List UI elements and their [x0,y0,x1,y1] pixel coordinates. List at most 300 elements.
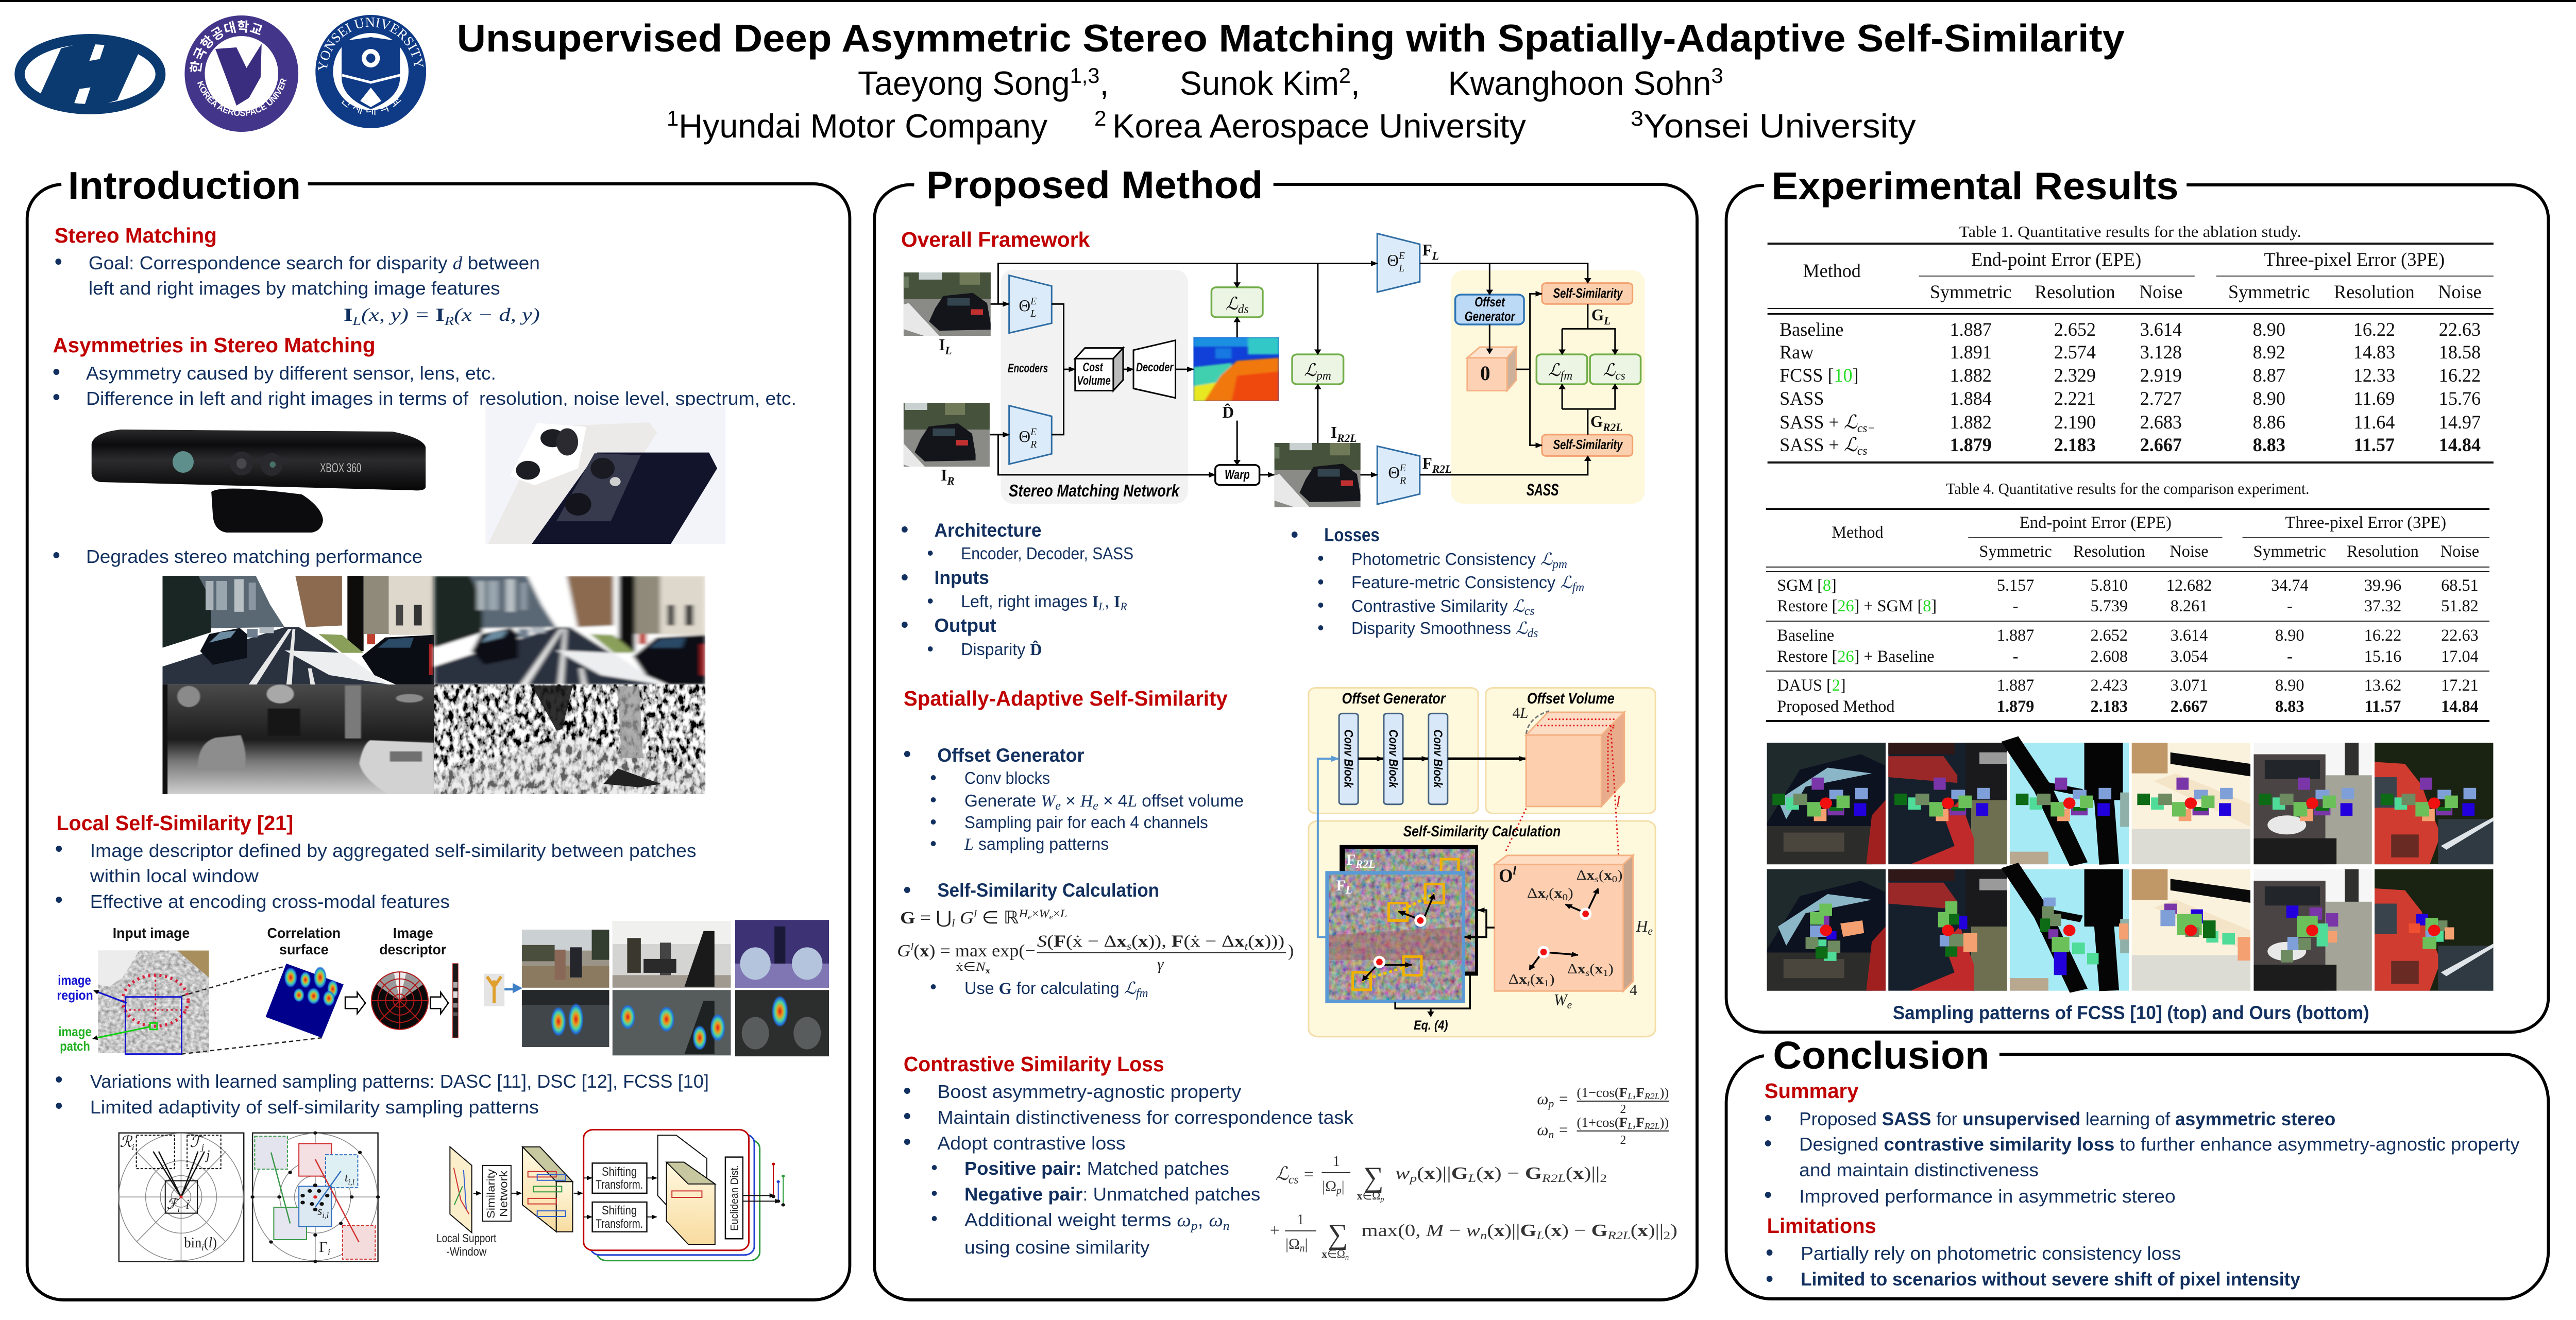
text: architecture inputs output: Disparity D̂ [961,640,1042,659]
formula: G definition: G = ⋃ [900,908,947,928]
formula: cosine weights: 2 [1620,1134,1626,1147]
diagram labels: Offset Volume [1527,690,1615,707]
table 1: ablation study: 3.614 [2140,319,2182,340]
text: offset generator bullets: L offset volume [1127,791,1240,811]
text: summary bullets [1765,1109,2520,1207]
table 4: comparison experiment: 2.183 [2091,697,2128,716]
authors: , [1351,64,1360,102]
formula: G definition: l [952,918,955,929]
formula: cosine weights: 2 [1620,1103,1626,1116]
table 1: ablation study: 11.57 [2354,434,2395,455]
photo: left sharp street [162,576,434,684]
formula: contrastive similarity loss: | [1305,1236,1308,1253]
formula: contrastive similarity loss: p [1409,1172,1417,1185]
framework labels: I [1331,423,1337,441]
table 4: comparison experiment: SGM [ [1777,576,1823,595]
formula: G^l definition: x) = max exp(− [920,941,1027,961]
diagram labels: ( [1599,867,1604,883]
diagram labels: ) [1608,961,1614,976]
framework labels: Decoder [1136,361,1174,374]
table 4: comparison experiment: 26] + Baseline [1837,647,1935,666]
arrow: blue [504,983,522,993]
diagram labels: e [1567,999,1572,1011]
table 4: comparison experiment: - [2287,647,2293,666]
formula: contrastive similarity loss: 1 [1333,1153,1340,1169]
affiliations: Korea Aerospace University [1112,107,1526,145]
table 1: ablation study: 2.683 [2140,412,2182,433]
table 1: ablation study: 14.84 [2439,434,2481,455]
diagram labels: Δx [1509,971,1526,987]
diagram labels: x [1604,867,1613,883]
table 4: comparison experiment: 51.82 [2441,597,2479,615]
subheading: Asymmetries in Stereo Matching: Asymmetries in Stereo Matching [53,333,376,357]
diagram labels: W [1554,991,1567,1009]
table 1: ablation study: Noise [2438,281,2482,302]
table 4: comparison experiment: DAUS [ [1777,676,1832,695]
text: architecture inputs output [902,520,1133,659]
text: contrastive loss bullets [904,1082,1353,1258]
formula: G definition: W [1039,907,1050,920]
table 4: comparison experiment: Symmetric [1979,542,2052,561]
panel: Conclusion [1726,1034,2548,1299]
text: self-similarity calculation: Use G for calculating ℒ [964,979,1136,998]
text: offset generator bullets: Conv blocks [964,768,1050,787]
formula: cosine weights: )) [1659,1115,1669,1130]
formula: contrastive similarity loss [1270,1153,1677,1262]
table 1: ablation study: FCSS [ [1780,365,1834,386]
formula: G definition: L [1060,907,1067,920]
subheading: Summary: Summary [1765,1079,1859,1103]
text: summary bullets: Improved performance in asymmetric stereo [1799,1186,2176,1207]
formula: contrastive similarity loss: ( [1476,1164,1483,1183]
logo: Korea Aerospace University [184,15,299,132]
figure: sampling pattern diagrams [119,1129,785,1263]
subheading: Spatially-Adaptive Self-Similarity: Spatially-Adaptive Self-Similarity [904,687,1228,710]
text: offset generator bullets: Generate W [964,791,1055,811]
text: stereo matching goal: I [435,304,445,325]
framework labels: SASS [1527,481,1558,499]
framework labels: R [1399,475,1406,486]
image: Kinect sensor [92,430,426,533]
row: our patterns [1767,865,2493,991]
diagram: spatially-adaptive self-similarity [1309,688,1655,1037]
table 1: ablation study: End-point Error (EPE) [1971,249,2141,270]
table 1: ablation study: 8.92 [2253,341,2285,363]
text: architecture inputs output: Encoder, Decoder, SASS [961,544,1133,563]
formula: contrastive similarity loss: ( [1566,1164,1573,1183]
table 4: comparison experiment: 5.739 [2091,597,2128,615]
image: right input [904,403,990,467]
formula: contrastive similarity loss: n [1345,1254,1349,1262]
image descriptor [371,971,428,1030]
framework labels [939,241,1625,500]
figure: local self-similarity pipeline [57,920,829,1056]
table 1: ablation study: 11.64 [2353,412,2395,433]
formula: G definition: l [974,908,977,920]
loss: ds [1211,287,1263,317]
panel: Experimental Results [1726,164,2548,1032]
table 4: comparison experiment: 8] [1823,576,1837,595]
affiliations: 3 [1631,106,1643,130]
text: LSS bullets: Effective at encoding cross-modal features [90,892,450,912]
block: SASS background [1451,270,1645,504]
formula: contrastive similarity loss: |Ω [1322,1178,1336,1195]
diagram labels: F [1346,852,1355,868]
text: architecture inputs output: Inputs [934,567,989,588]
diagram labels: t [345,1171,348,1185]
table 1: ablation study: Raw [1780,341,1814,363]
formula: contrastive similarity loss: x)|| [1573,1164,1597,1183]
framework labels: ℒ [1226,295,1238,314]
table 4: comparison experiment: 13.62 [2364,676,2401,695]
diagram labels: Conv Block [1341,729,1355,788]
framework labels: L [944,345,952,357]
diagram labels: ( [1530,971,1536,987]
block: offset cube [1467,347,1516,391]
diagram labels: ( [1589,961,1595,976]
formula: cosine weights: = [1554,1121,1569,1139]
text: LSS bullets: within local window [90,866,259,886]
table 4: comparison experiment: 3.614 [2171,626,2208,645]
table 1: ablation study: cs [1857,444,1867,458]
text: offset generator bullets [904,745,1244,854]
framework labels: R2L [1336,432,1357,444]
table 4: comparison experiment: 1.879 [1997,697,2034,716]
logo: Korea Aerospace University: 한국항공대학교 [190,20,262,72]
diagram labels: bin [184,1235,202,1250]
figure labels: Correlation [267,925,341,941]
formula: cosine weights: (1+cos(F [1577,1115,1627,1130]
image: warped right [1275,443,1361,507]
text: offset generator bullets: e [1093,799,1098,813]
table 4: comparison experiment: 16.22 [2364,626,2401,645]
encoder: right [1009,406,1052,464]
text: limitations bullets: Limited to scenarios without severe shift of pixel intensity [1801,1269,2300,1290]
text: architecture inputs output: L [1098,601,1105,613]
table 4: comparison experiment: Resolution [2347,542,2419,561]
table 1: ablation study: 1.891 [1950,341,1992,363]
diagram labels [1336,690,1653,1033]
text: contrastive loss bullets: , [1198,1210,1209,1230]
diagram labels: l) [209,1235,217,1250]
formula: contrastive similarity loss: x∈Ω [1321,1248,1345,1260]
logo: Hyundai [20,39,161,110]
feature map: FR2L [1340,845,1478,975]
authors: Taeyong Song [858,64,1067,102]
table 4: comparison experiment: 2.652 [2091,626,2128,645]
diagram labels: ) [1617,867,1622,883]
framework labels: 0 [1480,362,1490,385]
formula: contrastive similarity loss: x∈Ω [1357,1190,1380,1202]
text: contrastive loss bullets: Negative pair: Unmatched patches [964,1184,1260,1205]
figure: sampling pattern thumbnails [1767,739,2493,991]
table 1: ablation study: 1.882 [1950,412,1992,433]
formula: cosine weights: p [1547,1098,1554,1110]
image: left input [904,272,991,336]
affiliations: Yonsei University [1643,107,1916,145]
formula: G^l definition: t [1244,941,1248,952]
block: stereo matching network background [1001,270,1188,504]
table 4: comparison experiment: 1.887 [1997,626,2034,645]
table 1: ablation study: Symmetric [2228,281,2310,302]
diagram labels: Self-Similarity Calculation [1403,823,1561,840]
formula: contrastive similarity loss: ( [1631,1221,1637,1240]
text: architecture inputs output: , [1105,592,1114,611]
text: LSS bullets [56,841,697,912]
formula: contrastive similarity loss: x)|| [1637,1221,1660,1240]
formula: contrastive similarity loss: max(0, M − w [1362,1221,1478,1240]
formula: cosine weights: , [1633,1115,1636,1130]
authors: 1,3 [1070,63,1099,88]
text: offset generator bullets: L sampling patterns [964,834,1109,854]
figure labels: image [58,973,91,988]
table 1: ablation study: 16.22 [2353,319,2395,340]
table 4: comparison experiment: 8.261 [2171,597,2208,615]
table 1: ablation study: Method [1803,260,1861,281]
table 4: comparison experiment: 3.054 [2171,647,2208,666]
formula: cosine weights: n [1548,1128,1554,1141]
table 4: comparison experiment: End-point Error (EPE) [2020,513,2172,532]
subheading: Contrastive Similarity Loss: Contrastive Similarity Loss [904,1052,1164,1076]
formula: cosine weights: = [1554,1090,1569,1108]
diagram labels: s [1595,874,1599,884]
authors: Kwanghoon Sohn [1448,64,1706,102]
formula: contrastive similarity loss: p [1335,1185,1342,1196]
diagram labels: Shifting [602,1204,637,1218]
text: limitations bullets: Partially rely on photometric consistency loss [1801,1243,2181,1264]
icon: person template [484,974,504,1006]
table 4: comparison experiment: Restore [ [1777,597,1837,615]
formula: cosine weights: , [1633,1085,1636,1100]
text: contrastive loss bullets: Boost asymmetry-agnostic property [937,1082,1241,1102]
diagram labels: j [200,1142,204,1152]
text: architecture inputs output: I [1114,593,1120,611]
logo: Yonsei University: 연 세 대 학 교 [342,98,401,115]
diagram labels: x [1554,885,1563,901]
table 1: ablation study: ℒ [1844,434,1858,455]
text: summary bullets: Proposed SASS for unsupervised learning of asymmetric stereo [1799,1109,2335,1129]
framework labels: G [1591,306,1604,324]
diagram labels: Δx [1577,867,1594,883]
diagram labels: 0 [1563,892,1568,902]
diagram labels: i,l [348,1178,355,1187]
loss: cs [1590,354,1641,384]
formula: cosine weights: F [1636,1115,1645,1130]
table 1: ablation study: Table 1. Quantitative results for the ablation study. [1959,223,2301,241]
diagram labels: l [1513,864,1516,878]
formula: contrastive similarity loss: |Ω [1285,1236,1300,1253]
diagram labels: -Window [446,1245,487,1258]
framework labels: Θ [1387,251,1399,269]
table 4: comparison experiment: Table 4. Quantitative results for the comparison experiment. [1946,480,2309,498]
diagram labels: s [1585,968,1590,978]
subheading: Local Self-Similarity: Local Self-Similarity [21] [56,811,293,835]
table 4: comparison experiment: 5.810 [2091,576,2128,595]
text: contrastive loss bullets: using cosine similarity [964,1237,1150,1258]
subheading: Overall Framework: Overall Framework [901,228,1090,251]
formula: cosine weights: ω [1537,1121,1548,1139]
affiliations [667,106,1916,145]
formula: contrastive similarity loss: p [1380,1195,1384,1204]
table 4: comparison experiment: 34.74 [2271,576,2309,595]
formula: contrastive similarity loss: | [1342,1178,1345,1195]
table 1: ablation study: SASS [1780,388,1824,409]
image: dual camera phones [485,406,725,544]
diagram labels: Local Support [436,1231,497,1245]
conv blocks [1339,713,1448,804]
image: Kinect sensor: XBOX 360 [320,461,361,475]
formula: contrastive similarity loss: R2L [1541,1172,1566,1185]
subheading: Stereo Matching: Stereo Matching [54,224,217,247]
feature map: FL [1327,873,1463,1001]
formula: G^l definition: l [910,941,914,953]
framework labels: ℒ [1603,361,1615,380]
block: cost volume [1075,348,1123,391]
framework labels: L [1432,250,1439,262]
framework labels: Offset [1475,295,1505,310]
diagram: DSC sampling [250,1132,380,1263]
table 1: ablation study: 11.69 [2353,388,2395,409]
heading: Conclusion: Conclusion [1773,1034,1989,1077]
diagram labels: Conv Block [1431,729,1445,788]
table 4: comparison experiment: 22.63 [2441,626,2479,645]
table 1: ablation study: 1.887 [1950,319,1992,340]
diagram labels: ( [1549,885,1554,901]
formula: G^l definition: ) [1288,941,1294,961]
table 1: ablation study: 2.221 [2054,388,2096,409]
framework labels: E [1399,462,1406,474]
formula: contrastive similarity loss: 2 [1664,1229,1670,1242]
formula: cosine weights: R2L [1644,1091,1659,1101]
text: losses: ds [1528,627,1538,640]
diagram labels: s [317,1205,322,1218]
table 4: comparison experiment: - [2287,597,2293,615]
text: losses: pm [1551,558,1567,571]
text: stereo matching goal [55,253,540,328]
text: limitations bullets [1767,1243,2300,1290]
text: architecture inputs output: Architecture [934,520,1041,541]
table 4: comparison experiment: 2.423 [2091,676,2128,695]
diagram labels: i,l [322,1211,329,1220]
formula: contrastive similarity loss: ( [1487,1221,1494,1240]
formula: contrastive similarity loss: n [1300,1243,1305,1254]
framework labels: Volume [1077,374,1111,388]
text: stereo matching goal: left and right images by matching image features [89,278,500,299]
table 4: comparison experiment: 2] [1832,676,1846,695]
text: stereo matching goal: (x − d, y) [454,304,540,325]
header bar [0,0,2576,2]
table 1: ablation study: Symmetric [1930,281,2011,302]
framework labels: F [1422,454,1432,472]
formula: G^l definition: ( [1131,932,1138,951]
table 1: ablation study: 8.86 [2253,412,2285,433]
table 1: ablation study: Three-pixel Error (3PE) [2264,249,2445,270]
formula: cosine weights: )) [1659,1085,1669,1100]
framework labels: R2L [1602,421,1622,434]
diagram labels: Δx [1527,885,1544,901]
table 4: comparison experiment: 11.57 [2365,697,2401,716]
diagram labels: Eq. (4) [1414,1019,1448,1033]
arrows: offset to features and output [1395,910,1495,1016]
table 4: comparison experiment: Baseline [1777,626,1834,645]
row: FCSS patterns [1767,739,2493,864]
figure labels: Input image [113,925,190,941]
table 4: comparison experiment: Method [1832,523,1884,542]
diagram labels: ℱ [166,1196,178,1212]
table 1: ablation study: 2.667 [2140,434,2182,455]
table 1: ablation study: 8.87 [2253,365,2285,386]
table 4: comparison experiment: 2.608 [2091,647,2128,666]
table 1: ablation study: 14.83 [2353,341,2395,363]
authors: 2 [1339,63,1351,88]
formula: cosine weights: (1−cos(F [1577,1085,1627,1100]
table 4: comparison experiment: Noise [2441,542,2479,561]
table 4: comparison experiment: 15.16 [2364,647,2401,666]
text: contrastive loss bullets: Maintain distinctiveness for correspondence task [937,1107,1353,1128]
diagram labels: ℛ [120,1134,132,1151]
formula: G^l definition: ẋ∈ N [956,961,984,974]
diagram labels: ) [1549,971,1555,987]
framework labels: L [1603,315,1611,327]
formula: G definition: H [1019,907,1029,920]
offset slice O^l [1495,855,1633,991]
text: offset generator bullets: H [1080,792,1094,811]
formula: contrastive similarity loss: ∑ [1328,1218,1348,1250]
arrow: feature input [1318,759,1338,937]
text: losses: fm [1572,581,1584,594]
diagram labels: Conv Block [1386,729,1400,788]
text: architecture inputs output: Output [934,615,996,636]
text: offset generator bullets: × [1061,791,1080,810]
diagram labels: i [201,1242,204,1253]
table 4: comparison experiment: 37.32 [2364,597,2401,615]
hollow arrow [345,992,365,1014]
table 1: ablation study: 1.884 [1950,388,1992,409]
formula: contrastive similarity loss: x) − G [1551,1221,1604,1240]
formula: G^l definition: x))) [1255,932,1281,951]
arrows: framework connections [990,263,1615,475]
formula: cosine weights [1537,1085,1669,1147]
formula: G^l definition: x [986,967,990,975]
table 1: ablation study: 8.90 [2253,388,2285,409]
diagram labels: Network [497,1171,510,1217]
diagram labels: i [328,1247,330,1257]
text: losses: Feature-metric Consistency ℒ [1351,573,1572,592]
figure labels: descriptor [379,941,446,957]
text: self-similarity calculation [897,880,1294,1000]
image: KITTI stereo comparison grid [162,183,2547,1301]
text: contrastive loss bullets: p [1190,1220,1198,1233]
arrows: conv chain [1358,758,1526,760]
diagram labels: R2L [1355,858,1375,870]
figure labels: image [58,1025,92,1039]
affiliations: Hyundai Motor Company [679,107,1047,145]
figure labels: patch [60,1039,90,1054]
framework labels: Generator [1465,310,1516,324]
table 4: comparison experiment: Symmetric [2253,542,2326,561]
framework labels: ℒ [1304,361,1316,380]
logo: Yonsei University: YONSEI UNIVERSITY [318,18,423,71]
framework labels: I [939,336,945,354]
text: architecture inputs output: Left, right images I [961,592,1098,611]
table 4: comparison experiment: 3.071 [2171,676,2208,695]
encoder: left [1009,276,1052,333]
block: warp [1215,465,1260,485]
loss: pm [1292,354,1344,384]
formula: contrastive similarity loss: = [1298,1165,1314,1184]
text: stereo matching goal: (x, y) = [361,304,435,325]
formula: G^l definition: S(F(ẋ − Δ x [1037,932,1125,951]
